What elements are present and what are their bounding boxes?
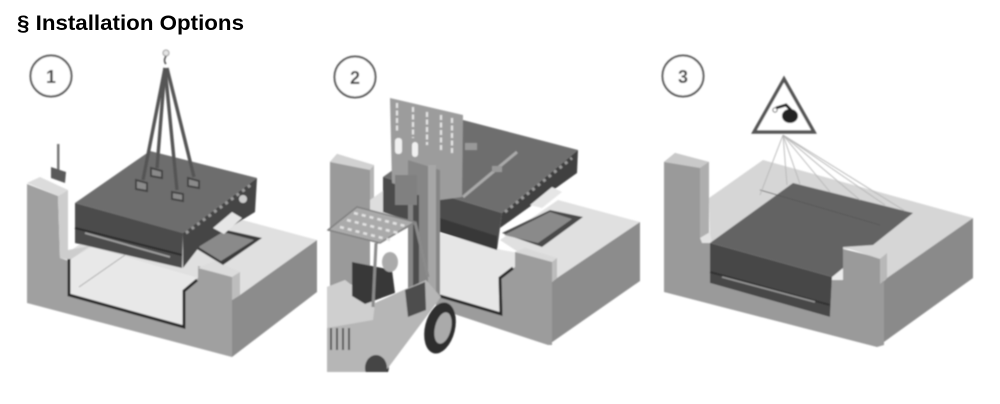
number badge 3: 3 [678, 67, 688, 87]
number badge 1 [30, 56, 72, 96]
warning sign with strings [754, 79, 905, 211]
panel: option 2, forklift [327, 56, 640, 382]
number badge 1: 1 [46, 67, 56, 87]
dock leveller suspended [75, 151, 262, 268]
title: § Installation Options [17, 12, 244, 35]
lifting slings and hook [136, 50, 199, 201]
front wheel [423, 302, 457, 355]
mast and carriage [390, 98, 463, 300]
rear wheel [386, 366, 390, 373]
overhead guard [328, 207, 428, 307]
number badge 2: 2 [350, 68, 360, 88]
truck body [327, 280, 441, 372]
number badge 2 [334, 56, 376, 98]
side pole [51, 144, 66, 183]
concrete pit block 1 [27, 144, 317, 357]
number badge 3 [662, 56, 704, 96]
concrete pit block 2 [330, 154, 640, 345]
panel: option 1, crane lift [27, 50, 317, 357]
panel: option 3, installed [662, 56, 973, 347]
dock leveller on forks [383, 120, 583, 250]
concrete pit block 3 [664, 153, 973, 347]
installed leveller [710, 183, 913, 317]
icon: hand hazard [773, 105, 798, 123]
forklift [327, 98, 463, 382]
